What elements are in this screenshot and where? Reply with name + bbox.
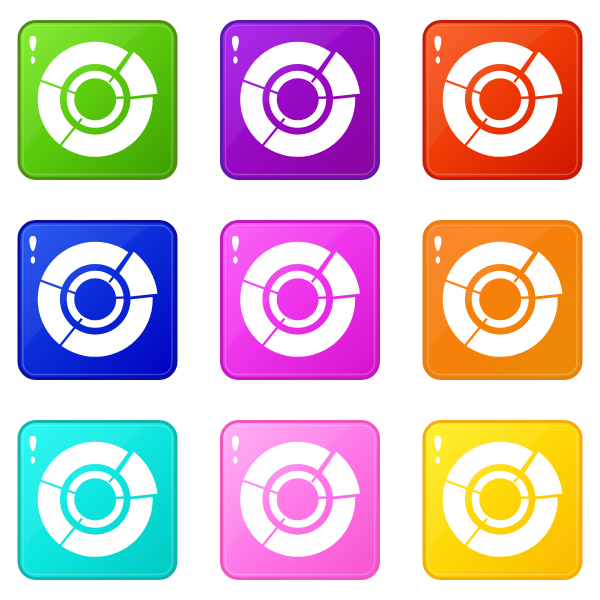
icon tile: green — [15, 19, 176, 179]
icon tile: cyan — [15, 419, 176, 579]
icon tile: orange — [420, 219, 581, 379]
icon tile: magenta — [218, 219, 378, 379]
icon tile: red — [420, 19, 581, 179]
icon tile: pink — [218, 419, 378, 579]
icon tile: yellow — [420, 419, 581, 579]
icon tile: purple — [218, 19, 378, 179]
icon tile: blue — [15, 219, 176, 379]
